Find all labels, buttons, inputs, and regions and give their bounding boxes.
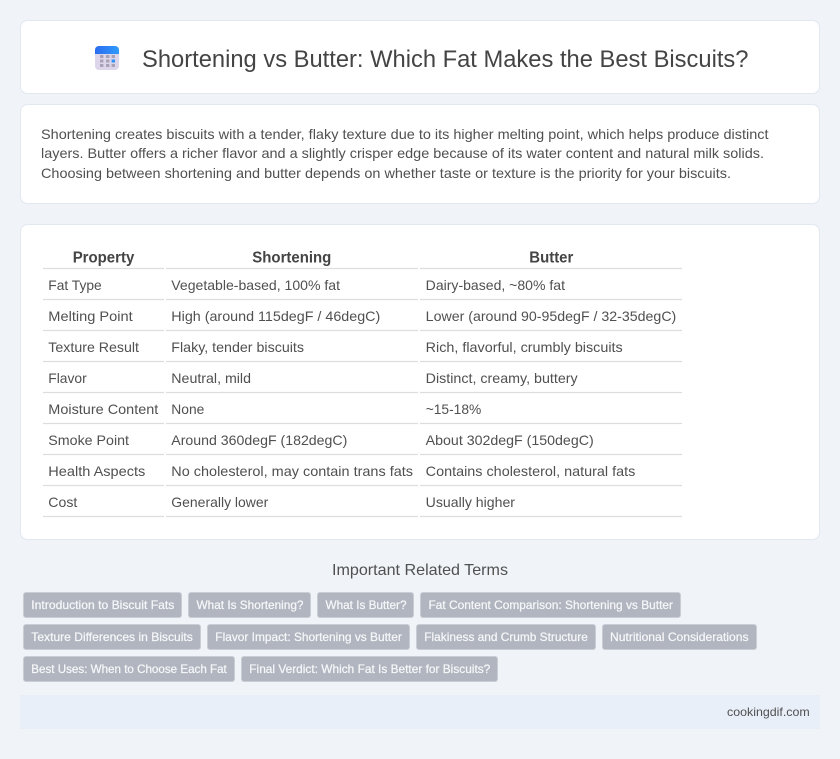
row: moisture content: ~15-18% (426, 401, 481, 417)
row: texture result: Rich, flavorful, crumbly biscuits (426, 339, 623, 355)
related terms tags (24, 592, 756, 682)
table header (73, 250, 573, 266)
table header: Butter (529, 250, 573, 266)
tag: flakiness (416, 624, 596, 650)
footer (20, 695, 820, 729)
row: health aspects: No cholesterol, may contain trans fats (171, 463, 413, 479)
tag: flavor impact: Flavor Impact: Shortening vs Butter (215, 630, 402, 644)
row: melting point: Lower (around 90-95degF / 32-35degC) (426, 308, 676, 324)
intro paragraph: Shortening creates biscuits with a tender, flaky texture due to its higher melting point, which helps produce distinct (41, 126, 769, 142)
row: fat type: Fat Type (48, 277, 102, 293)
row: melting point: High (around 115degF / 46degC) (171, 308, 380, 324)
row: smoke point (48, 432, 594, 448)
row: cost (48, 494, 515, 510)
row: flavor: Neutral, mild (171, 370, 251, 386)
row: health aspects (48, 463, 635, 479)
tag: what is butter: What Is Butter? (326, 598, 407, 612)
row: cost: Usually higher (426, 494, 515, 510)
tag: flakiness: Flakiness and Crumb Structure (424, 630, 588, 644)
tag: final verdict: Final Verdict: Which Fat Is Better for Biscuits? (249, 662, 491, 676)
row: smoke point: Around 360degF (182degC) (171, 432, 347, 448)
header panel (20, 20, 820, 94)
tag: what is shortening: What Is Shortening? (196, 598, 304, 612)
row: smoke point: About 302degF (150degC) (426, 432, 594, 448)
tag: introduction (24, 592, 182, 618)
icon: calendar (95, 46, 119, 70)
row: melting point: Melting Point (48, 308, 133, 324)
row: texture result (48, 339, 623, 355)
tag: nutritional considerations: Nutritional Considerations (610, 630, 748, 644)
row: smoke point: Smoke Point (48, 432, 129, 448)
intro paragraph: layers. Butter offers a richer flavor and a slightly crisper edge because of its water content and natural milk solids. (41, 145, 764, 161)
tag: nutritional considerations (602, 624, 756, 650)
row: texture result: Texture Result (48, 339, 139, 355)
row: flavor: Distinct, creamy, buttery (426, 370, 578, 386)
tag: final verdict (242, 656, 498, 682)
footer source text: cookingdif.com (727, 705, 810, 719)
row: moisture content: Moisture Content (48, 401, 158, 417)
tag: what is butter (318, 592, 414, 618)
row: fat type: Vegetable-based, 100% fat (171, 277, 340, 293)
row: fat type: Dairy-based, ~80% fat (426, 277, 565, 293)
tag: best uses (24, 656, 234, 682)
row: cost: Generally lower (171, 494, 269, 510)
tag: what is shortening (188, 592, 310, 618)
row: texture result: Flaky, tender biscuits (171, 339, 304, 355)
row: melting point (48, 308, 676, 324)
tag: introduction: Introduction to Biscuit Fats (31, 598, 174, 612)
panel: comparison table (20, 224, 820, 540)
tag: best uses: Best Uses: When to Choose Each Fat (31, 662, 227, 676)
tag: texture differences: Texture Differences in Biscuits (31, 630, 193, 644)
title: Shortening vs Butter: Which Fat Makes the Best Biscuits? (142, 46, 748, 73)
tag: fat content comparison (420, 592, 680, 618)
intro paragraph (41, 126, 769, 181)
row: health aspects: Contains cholesterol, natural fats (426, 463, 635, 479)
panel: introduction (20, 104, 820, 204)
table header: Property (73, 250, 134, 266)
related terms heading: Important Related Terms (332, 562, 508, 579)
tag: fat content comparison: Fat Content Comparison: Shortening vs Butter (428, 598, 673, 612)
row: cost: Cost (48, 494, 77, 510)
row: health aspects: Health Aspects (48, 463, 145, 479)
row: moisture content (48, 401, 481, 417)
table header: Shortening (252, 250, 331, 266)
row: moisture content: None (171, 401, 205, 417)
row: flavor: Flavor (48, 370, 87, 386)
tag: texture differences (24, 624, 200, 650)
intro paragraph: Choosing between shortening and butter depends on whether taste or texture is the priority for your biscuits. (41, 165, 731, 181)
tag: flavor impact (208, 624, 410, 650)
row: flavor (48, 370, 578, 386)
row: fat type (48, 277, 565, 293)
